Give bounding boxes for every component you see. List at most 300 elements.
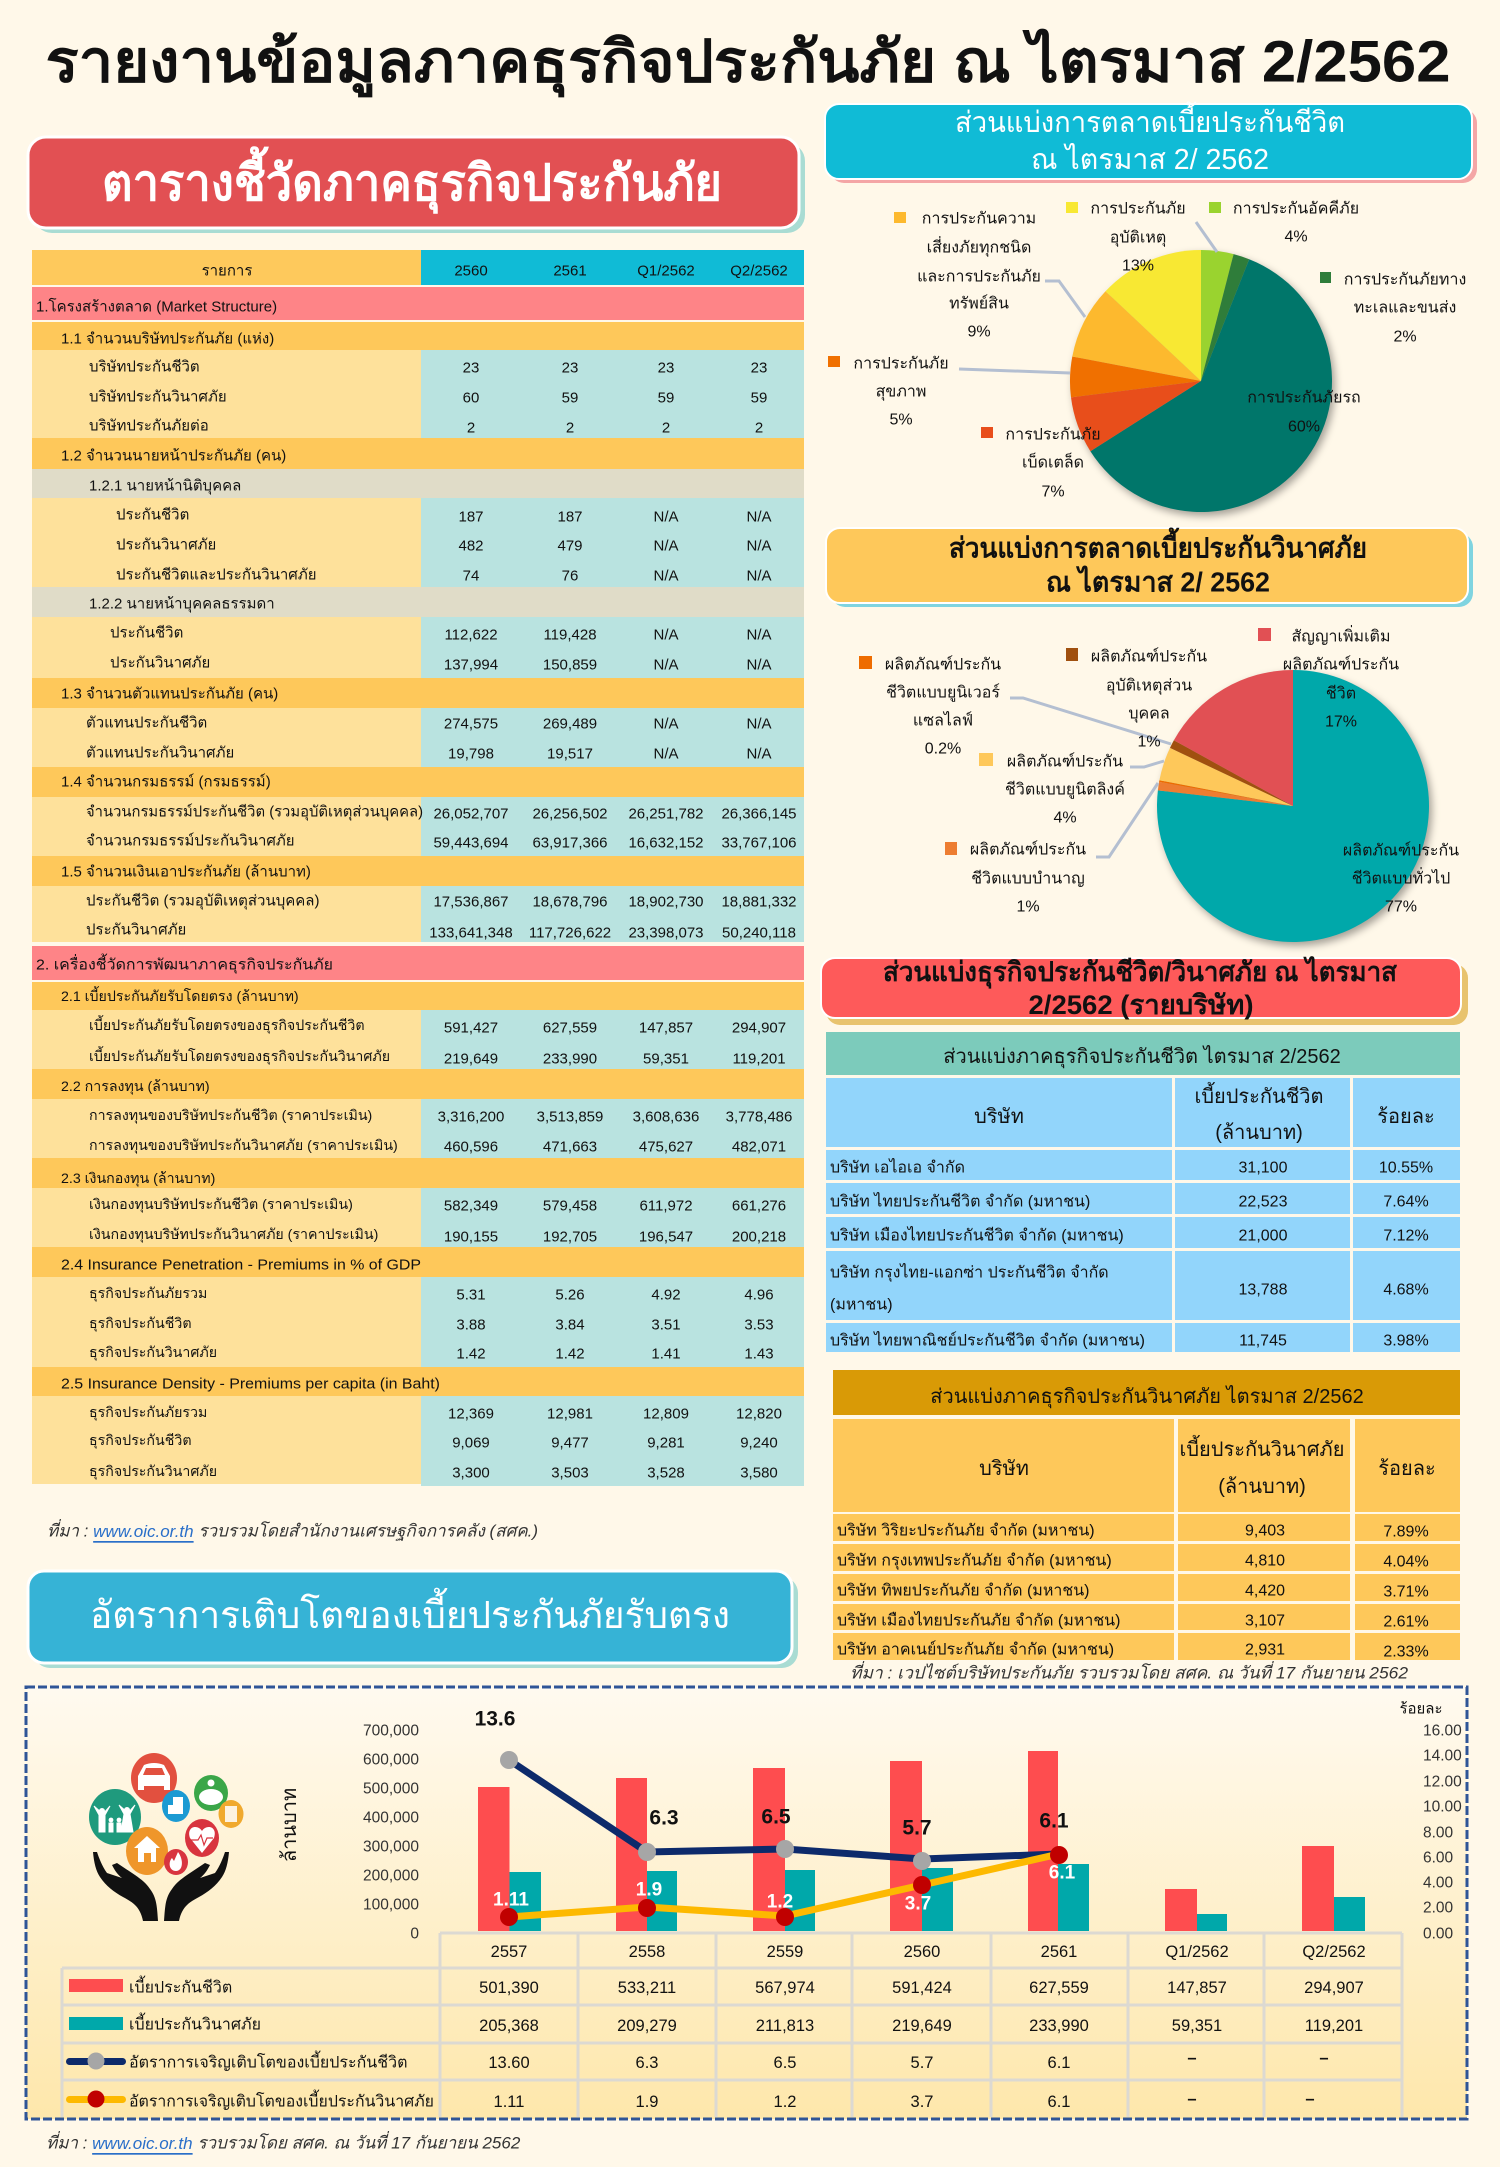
panel: non-life insurance company table: (ล้านบาท) (1218, 1476, 1306, 1498)
icon: hands holding insurance bubbles (89, 1753, 244, 1921)
legend row: non-life premium: 233,990 (1029, 2017, 1089, 2035)
label: personal accident: ผลิตภัณฑ์ประกัน (1091, 646, 1207, 666)
label: property and all-risk: ทรัพย์สิน (949, 294, 1009, 312)
section 2: development indicators: 233,990 (543, 1050, 597, 1068)
section 2: development indicators: ธุรกิจประกันวินาศภัย (89, 1464, 217, 1480)
section 1: market structure: 117,726,622 (529, 924, 611, 942)
icon: right hand (164, 1852, 229, 1921)
section 1: market structure: 2 (662, 420, 670, 436)
section 2: development indicators: 661,276 (732, 1198, 786, 1214)
section 2: development indicators: 3,778,486 (726, 1108, 792, 1126)
section 1: market structure: ประกันวินาศภัย (110, 654, 210, 672)
table header: 2560 (454, 262, 488, 280)
section 1: market structure: 59 (751, 390, 767, 406)
axis label: million baht: ล้านบาท (279, 1788, 301, 1862)
label: marine: การประกันภัยทาง (1344, 272, 1466, 288)
section 2: development indicators: 3,503 (551, 1464, 589, 1482)
section 2: development indicators: 471,663 (543, 1138, 597, 1156)
section 1: market structure: N/A (653, 656, 679, 674)
section 1: market structure: 269,489 (543, 716, 597, 732)
table header: 2561 (553, 262, 587, 280)
banner: non-life market share (826, 526, 1473, 607)
section 2: development indicators: 1.42 (456, 1346, 486, 1362)
source note: table: ที่มา : www.oic.or.th รวบรวมโดยสำนักงานเศรษฐกิจการคลัง (สศค.) (47, 1518, 538, 1542)
section 2: development indicators: 190,155 (444, 1228, 498, 1246)
legend row: non-life growth: – (1187, 2090, 1197, 2108)
label: miscellaneous: การประกันภัย (1005, 426, 1101, 444)
panel: life insurance company table: บริษัท กรุงไทย-แอกซ่า ประกันชีวิต จำกัด (830, 1262, 1109, 1282)
section 1: market structure: 133,641,348 (429, 924, 513, 942)
label: property and all-risk: และการประกันภัย (917, 268, 1041, 286)
panel: non-life insurance company table: 3,107 (1245, 1612, 1285, 1630)
section 2: development indicators: 12,369 (448, 1406, 494, 1422)
panel: life insurance company table: บริษัท เอไอเอ จำกัด (830, 1158, 965, 1176)
banner: company market share: 2/2562 (รายบริษัท) (1028, 990, 1254, 1020)
section 1: market structure: ประกันชีวิต (110, 624, 183, 642)
icon: left hand (93, 1852, 158, 1921)
section 1: market structure: ตัวแทนประกันชีวิต (86, 714, 207, 732)
label: riders: 17% (1325, 714, 1357, 730)
section 1: market structure: 1.2.1 นายหน้านิติบุคคล (89, 478, 241, 496)
label: ordinary life: ผลิตภัณฑ์ประกัน (1343, 840, 1459, 860)
section 2: development indicators: การลงทุนของบริษัทประกันวินาศภัย (ราคาประเมิน) (89, 1138, 398, 1154)
left axis: 200,000 (363, 1868, 419, 1884)
banner: company market share: ส่วนแบ่งธุรกิจประกันชีวิต/วินาศภัย ณ ไตรมาส (883, 956, 1397, 989)
data table: 2561 (1041, 1943, 1077, 1961)
table header: Q1/2562 (637, 262, 695, 280)
panel: life insurance company table: บริษัท (974, 1106, 1024, 1128)
label: ordinary life (1343, 840, 1459, 916)
section 1: market structure: 19,798 (448, 746, 494, 762)
section 2: development indicators: ธุรกิจประกันวินาศภัย (89, 1345, 217, 1361)
section 1: market structure: 187 (458, 508, 484, 526)
legend row: life growth: – (1319, 2049, 1329, 2067)
label: health: การประกันภัย (853, 356, 949, 372)
panel: life insurance company table: 21,000 (1239, 1228, 1288, 1244)
panel: non-life insurance company table: บริษัท กรุงเทพประกันภัย จำกัด (มหาชน) (837, 1552, 1112, 1570)
label: ordinary life: ชีวิตแบบทั่วไป (1352, 866, 1450, 888)
panel: life insurance company table: 11,745 (1239, 1332, 1287, 1350)
section 1: market structure: 19,517 (547, 746, 593, 762)
data table: Q1/2562 (1165, 1943, 1229, 1961)
table header: Q2/2562 (730, 262, 788, 280)
label: motor: 60% (1288, 418, 1320, 436)
legend row: non-life growth (66, 2090, 1315, 2111)
legend row: life growth: 13.60 (488, 2054, 530, 2072)
banner: life market share (825, 101, 1477, 183)
section 1: market structure: 26,366,145 (721, 806, 797, 822)
section 2: development indicators: 12,809 (643, 1406, 689, 1422)
line: non-life premium growth (500, 1846, 1068, 1926)
section 2: development indicators: 2. เครื่องชี้วัดการพัฒนาภาคธุรกิจประกันภัย (36, 954, 333, 974)
pie chart: non-life insurance (1157, 670, 1429, 942)
section 2: development indicators: 2.3 เงินกองทุน (ล้านบาท) (61, 1171, 215, 1187)
section 2: development indicators: 4.96 (744, 1286, 774, 1304)
label: accident: 13% (1122, 258, 1154, 274)
label: property and all-risk: 9% (967, 324, 991, 340)
panel: non-life insurance company table: 9,403 (1245, 1522, 1285, 1540)
section 1: market structure: N/A (653, 568, 679, 584)
section 1: market structure: ประกันชีวิตและประกันวินาศภัย (116, 566, 317, 584)
section 1: market structure: 26,251,782 (628, 806, 704, 822)
legend row: life growth: 5.7 (911, 2054, 933, 2072)
label: property and all-risk (894, 210, 1041, 340)
section 1: market structure: N/A (746, 568, 772, 584)
label: universal life: ชีวิตแบบยูนิเวอร์ (886, 682, 1000, 702)
section 2: development indicators: เงินกองทุนบริษัทประกันชีวิต (ราคาประเมิน) (89, 1197, 353, 1213)
data table (62, 1933, 1402, 2117)
label: universal life (859, 654, 1001, 758)
banner: premium growth heading (28, 1571, 798, 1668)
legend row: life premium: 533,211 (618, 1979, 676, 1997)
section 2: development indicators: 147,857 (639, 1020, 693, 1036)
legend row: non-life premium (69, 2012, 1363, 2035)
panel: non-life insurance company table: 3.71% (1383, 1584, 1429, 1600)
section 2: development indicators: ธุรกิจประกันภัยรวม (89, 1405, 207, 1421)
section 1: market structure: บริษัทประกันชีวิต (89, 358, 200, 376)
label: personal accident: 1% (1137, 734, 1161, 750)
label: accident: อุบัติเหตุ (1110, 230, 1166, 248)
left axis: 700,000 (363, 1722, 419, 1740)
data labels: 5.7 (902, 1816, 932, 1840)
section 1: market structure: 150,859 (543, 656, 597, 674)
section 2: development indicators: 475,627 (639, 1138, 693, 1156)
section 2: development indicators: 9,281 (647, 1434, 685, 1452)
section 1: market structure: บริษัทประกันวินาศภัย (89, 388, 227, 406)
right axis: 4.00 (1423, 1874, 1454, 1892)
leader lines (959, 222, 1217, 373)
section 1: market structure: 112,622 (444, 626, 498, 644)
section 1: market structure: N/A (653, 508, 679, 526)
section 1: market structure: 23,398,073 (628, 924, 704, 942)
banner: indicator table heading (28, 137, 805, 233)
legend row: life premium: 567,974 (755, 1979, 815, 1997)
legend row: life growth: อัตราการเจริญเติบโตของเบี้ยประกันชีวิต (129, 2050, 407, 2072)
label: annuity: 1% (1016, 898, 1040, 916)
label: unit linked: 4% (1053, 810, 1077, 826)
legend row: life premium (69, 1976, 1364, 1997)
source note: company tables: ที่มา : เวปไซต์บริษัทประกันภัย รวบรวมโดย สศค. ณ วันที่ 17 กันยายน 2562 (850, 1660, 1409, 1682)
label: miscellaneous (981, 426, 1101, 500)
section 2: development indicators: 119,201 (732, 1050, 786, 1068)
label: unit linked (979, 752, 1125, 826)
legend row: life growth: 6.3 (636, 2054, 658, 2072)
label: accident (1066, 200, 1186, 274)
label: universal life: 0.2% (925, 740, 961, 758)
section 2: development indicators: 5.31 (456, 1286, 486, 1304)
right axis: 14.00 (1423, 1748, 1462, 1764)
section 1: market structure: 23 (751, 360, 767, 376)
section 1: market structure: ประกันชีวิต (รวมอุบัติเหตุส่วนบุคคล) (86, 892, 319, 910)
section 1: market structure: 119,428 (543, 626, 597, 644)
line: life premium growth (500, 1751, 1059, 1870)
label: motor (1247, 390, 1361, 436)
banner: non-life market share: ณ ไตรมาส 2/ 2562 (1046, 566, 1270, 598)
label: universal life: แซลไลฟ์ (913, 710, 973, 730)
right axis: 12.00 (1423, 1774, 1462, 1790)
section 2: development indicators: เบี้ยประกันภัยรับโดยตรงของธุรกิจประกันชีวิต (89, 1015, 365, 1034)
section 2: development indicators: ธุรกิจประกันชีวิต (89, 1433, 192, 1449)
panel: non-life insurance company table: 7.89% (1383, 1524, 1429, 1540)
section 2: development indicators: 460,596 (444, 1138, 498, 1156)
legend row: life growth (66, 2049, 1329, 2072)
data table: Q2/2562 (1302, 1943, 1366, 1961)
section 2: development indicators: 3.84 (555, 1316, 585, 1334)
section 1: market structure: บริษัทประกันภัยต่อ (89, 418, 209, 434)
section 2: development indicators: 3,300 (452, 1464, 490, 1482)
panel: life insurance company table: 3.98% (1383, 1332, 1429, 1350)
panel: life insurance company table: 10.55% (1379, 1160, 1433, 1176)
section 1: market structure: ประกันวินาศภัย (86, 922, 186, 938)
data labels: 6.1 (1039, 1810, 1069, 1832)
label: marine (1320, 272, 1466, 346)
label: health: สุขภาพ (876, 384, 926, 402)
panel: life insurance company table: (มหาชน) (830, 1296, 893, 1314)
right axis: 8.00 (1423, 1824, 1454, 1842)
right axis: ร้อยละ (1399, 1700, 1443, 1718)
section 1: market structure: 16,632,152 (628, 834, 704, 852)
section 1: market structure: 26,256,502 (532, 806, 608, 822)
label: riders: สัญญาเพิ่มเติม (1292, 624, 1390, 646)
panel: non-life insurance company table: ร้อยละ (1378, 1458, 1436, 1480)
legend row: life premium: 627,559 (1029, 1979, 1089, 1997)
section 1: market structure: N/A (746, 508, 772, 526)
panel: premium growth chart and table (26, 1687, 1467, 2119)
table header (32, 250, 804, 285)
title: รายงานข้อมูลภาคธุรกิจประกันภัย ณ ไตรมาส 2/2562 (46, 28, 1451, 98)
panel: non-life insurance company table: 2.33% (1383, 1644, 1429, 1660)
legend row: non-life growth: 6.1 (1048, 2093, 1070, 2111)
section 2: development indicators: 59,351 (643, 1050, 689, 1068)
label: universal life: ผลิตภัณฑ์ประกัน (885, 654, 1001, 674)
section 1: market structure: 23 (658, 360, 674, 376)
section 1: market structure: 482 (458, 538, 484, 554)
data table: 2560 (904, 1943, 940, 1961)
section 2: development indicators: 1.42 (555, 1346, 585, 1362)
panel: life insurance company table: 4.68% (1383, 1282, 1429, 1298)
right axis: 16.00 (1423, 1722, 1462, 1740)
legend row: non-life growth: 1.9 (636, 2093, 658, 2111)
data labels: 3.7 (905, 1894, 931, 1914)
label: fire (1209, 200, 1359, 246)
section 1: market structure: N/A (746, 626, 772, 644)
legend row: non-life premium: 209,279 (617, 2017, 677, 2035)
label: health: 5% (889, 412, 913, 428)
legend row: non-life growth: อัตราการเจริญเติบโตของเบี้ยประกันวินาศภัย (129, 2090, 434, 2110)
panel: life insurance company table: (ล้านบาท) (1215, 1122, 1303, 1144)
section 2: development indicators: 627,559 (543, 1020, 597, 1036)
label: personal accident: บุคคล (1128, 706, 1170, 724)
section 1: market structure: 59,443,694 (433, 834, 509, 852)
section 2: development indicators: การลงทุนของบริษัทประกันชีวิต (ราคาประเมิน) (89, 1108, 372, 1124)
legend row: life premium: 294,907 (1304, 1979, 1364, 1997)
section 1: market structure: 59 (562, 390, 578, 406)
section 1: market structure: 76 (562, 568, 578, 584)
right axis: 0.00 (1423, 1926, 1454, 1942)
legend row: life growth: 6.1 (1048, 2054, 1070, 2072)
section 1: market structure: N/A (653, 626, 679, 644)
legend row: non-life premium: 59,351 (1172, 2017, 1222, 2035)
legend row: life growth: – (1187, 2049, 1197, 2067)
section 1: market structure: 1.4 จำนวนกรมธรรม์ (กรมธรรม์) (61, 774, 271, 790)
banner: life market share: ณ ไตรมาส 2/ 2562 (1031, 142, 1269, 176)
section 1: market structure: 63,917,366 (532, 834, 608, 852)
section 1: market structure: 60 (463, 390, 479, 406)
section 1: market structure: ตัวแทนประกันวินาศภัย (86, 744, 234, 762)
section 2: development indicators: 5.26 (555, 1286, 585, 1304)
panel: life insurance company table: บริษัท ไทยพาณิชย์ประกันชีวิต จำกัด (มหาชน) (830, 1330, 1145, 1350)
right axis: 2.00 (1423, 1900, 1454, 1916)
panel: non-life insurance company table: บริษัท วิริยะประกันภัย จำกัด (มหาชน) (837, 1522, 1095, 1540)
section 2: development indicators: 579,458 (543, 1198, 597, 1214)
section 1: market structure: 274,575 (444, 716, 498, 732)
section 2: development indicators: 3,316,200 (438, 1108, 504, 1126)
data labels: 1.2 (767, 1892, 793, 1912)
label: annuity: ชีวิตแบบบำนาญ (971, 870, 1085, 888)
section 1: market structure (32, 287, 804, 942)
section 1: market structure: 2 (755, 420, 763, 436)
section 1: market structure: 1.2.2 นายหน้าบุคคลธรรมดา (89, 596, 275, 614)
data labels: 6.5 (761, 1806, 791, 1828)
label: property and all-risk: เสี่ยงภัยทุกชนิด (927, 236, 1031, 258)
panel: non-life insurance company table: 4,420 (1245, 1582, 1285, 1600)
panel: non-life insurance company table: บริษัท เมืองไทยประกันภัย จำกัด (มหาชน) (837, 1610, 1120, 1630)
left axis: 600,000 (363, 1752, 419, 1768)
section 2: development indicators: 3,580 (740, 1464, 778, 1482)
label: fire: 4% (1284, 228, 1308, 246)
legend row: non-life growth: 1.2 (774, 2093, 796, 2111)
section 1: market structure: N/A (746, 538, 772, 554)
right axis: 6.00 (1423, 1850, 1454, 1866)
label: marine: 2% (1393, 328, 1417, 346)
section 1: market structure: ประกันวินาศภัย (116, 536, 216, 554)
section 1: market structure: 17,536,867 (433, 894, 509, 910)
section 1: market structure: 137,994 (444, 656, 498, 674)
section 2: development indicators: เงินกองทุนบริษัทประกันวินาศภัย (ราคาประเมิน) (89, 1227, 378, 1243)
legend row: non-life premium: 219,649 (892, 2017, 952, 2035)
section 2: development indicators: 219,649 (444, 1050, 498, 1068)
legend row: non-life growth: 3.7 (911, 2093, 933, 2111)
panel: non-life insurance company table: เบี้ยประกันวินาศภัย (1180, 1435, 1344, 1461)
right axis (1399, 1700, 1462, 1942)
label: fire: การประกันอัคคีภัย (1233, 200, 1359, 218)
section 1: market structure: N/A (653, 716, 679, 732)
section 2: development indicators: ธุรกิจประกันชีวิต (89, 1316, 192, 1332)
panel: life insurance market share (825, 101, 1477, 512)
left axis (363, 1722, 419, 1942)
section 1: market structure: 1.5 จำนวนเงินเอาประกันภัย (ล้านบาท) (61, 864, 311, 880)
panel: non-life insurance company table: บริษัท อาคเนย์ประกันภัย จำกัด (มหาชน) (837, 1640, 1114, 1658)
legend row: non-life premium: 205,368 (479, 2017, 539, 2035)
data table: 2557 (491, 1943, 527, 1961)
bar chart: premiums (478, 1751, 1365, 1931)
section 2: development indicators: 200,218 (732, 1228, 786, 1246)
section 2: development indicators: 294,907 (732, 1020, 786, 1036)
section 2: development indicators: 482,071 (732, 1138, 786, 1156)
section 1: market structure: 479 (557, 538, 583, 554)
label: motor: การประกันภัยรถ (1247, 390, 1361, 406)
label: annuity: ผลิตภัณฑ์ประกัน (970, 840, 1086, 858)
label: ordinary life: 77% (1385, 898, 1417, 916)
label: property and all-risk: การประกันความ (922, 210, 1036, 228)
section 2: development indicators: 9,240 (740, 1434, 778, 1452)
panel: non-life insurance company table: บริษัท ทิพยประกันภัย จำกัด (มหาชน) (837, 1582, 1090, 1600)
panel: non-life insurance company table: 2,931 (1245, 1642, 1285, 1658)
legend row: life growth: 6.5 (774, 2054, 796, 2072)
section 1: market structure: N/A (746, 716, 772, 732)
right axis: 10.00 (1423, 1798, 1462, 1816)
panel: non-life insurance company table: 4.04% (1383, 1554, 1429, 1570)
section 1: market structure: N/A (746, 746, 772, 762)
section 1: market structure: 187 (557, 508, 583, 526)
banner: company market share (821, 956, 1468, 1025)
panel: life insurance company table: บริษัท เมืองไทยประกันชีวิต จำกัด (มหาชน) (830, 1226, 1124, 1244)
section 1: market structure: 18,678,796 (532, 894, 608, 910)
section 2: development indicators: 1.41 (651, 1346, 681, 1362)
label: accident: การประกันภัย (1090, 200, 1186, 218)
section 2: development indicators: 611,972 (639, 1198, 693, 1214)
panel: non-life insurance company table: 2.61% (1383, 1614, 1429, 1630)
section 2: development indicators: 2.4 Insurance Penetration - Premiums in % of GDP (61, 1256, 421, 1274)
section 2: development indicators: 2.1 เบี้ยประกันภัยรับโดยตรง (ล้านบาท) (61, 986, 299, 1005)
leader lines (1010, 698, 1171, 857)
data table: 2559 (767, 1943, 803, 1961)
section 1: market structure: N/A (746, 656, 772, 674)
panel: life insurance company table: 22,523 (1239, 1194, 1288, 1210)
section 2: development indicators: 582,349 (444, 1198, 498, 1214)
data labels (475, 1708, 1076, 1914)
label: unit linked: ชีวิตแบบยูนิตลิงค์ (1005, 780, 1125, 800)
label: personal accident (1066, 646, 1207, 750)
section 2: development indicators: 3.53 (744, 1316, 774, 1334)
panel: life insurance company table: 13,788 (1239, 1282, 1288, 1298)
section 2: development indicators: 2.2 การลงทุน (ล้านบาท) (61, 1079, 210, 1095)
panel: indicator table (32, 250, 804, 1486)
panel: life insurance company table (826, 1032, 1460, 1352)
left axis: 300,000 (363, 1838, 419, 1856)
legend row: non-life growth: – (1305, 2090, 1315, 2108)
section 1: market structure: 23 (463, 360, 479, 376)
banner: non-life market share: ส่วนแบ่งการตลาดเบี้ยประกันวินาศภัย (949, 526, 1367, 564)
section 1: market structure: 23 (562, 360, 578, 376)
section 1: market structure: N/A (653, 538, 679, 554)
section 2: development indicators: 196,547 (639, 1228, 693, 1246)
section 1: market structure: 2 (467, 420, 475, 436)
panel: life insurance company table: ร้อยละ (1377, 1106, 1435, 1128)
section 2: development indicators: 3.51 (651, 1316, 681, 1334)
panel: life insurance company table: ส่วนแบ่งภาคธุรกิจประกันชีวิต ไตรมาส 2/2562 (943, 1045, 1341, 1069)
data labels: 1.9 (636, 1880, 662, 1900)
section 1: market structure: 1.โครงสร้างตลาด (Market Structure) (36, 298, 277, 316)
panel: non-life insurance market share (826, 526, 1473, 942)
section 2: development indicators: 3.88 (456, 1316, 486, 1334)
panel: non-life insurance company table: บริษัท (979, 1458, 1029, 1480)
panel: non-life insurance company table: 4,810 (1245, 1552, 1285, 1570)
section 1: market structure: 18,881,332 (721, 894, 797, 910)
panel: life insurance company table: 7.12% (1383, 1228, 1429, 1244)
left axis: 0 (410, 1926, 419, 1942)
section 1: market structure: 1.1 จำนวนบริษัทประกันภัย (แห่ง) (61, 330, 274, 348)
legend row: non-life premium: เบี้ยประกันวินาศภัย (129, 2012, 261, 2034)
legend row: life premium: 147,857 (1167, 1979, 1227, 1997)
panel: life insurance company table: 7.64% (1383, 1194, 1429, 1210)
section 1: market structure: 1.3 จำนวนตัวแทนประกันภัย (คน) (61, 686, 278, 702)
section 2: development indicators: 9,477 (551, 1434, 589, 1452)
legend row: life premium: เบี้ยประกันชีวิต (129, 1976, 232, 1996)
source note: growth chart: ที่มา : www.oic.or.th รวบรวมโดย สศค. ณ วันที่ 17 กันยายน 2562 (46, 2130, 521, 2152)
section 1: market structure: 2 (566, 420, 574, 436)
data labels: 1.11 (493, 1890, 529, 1910)
